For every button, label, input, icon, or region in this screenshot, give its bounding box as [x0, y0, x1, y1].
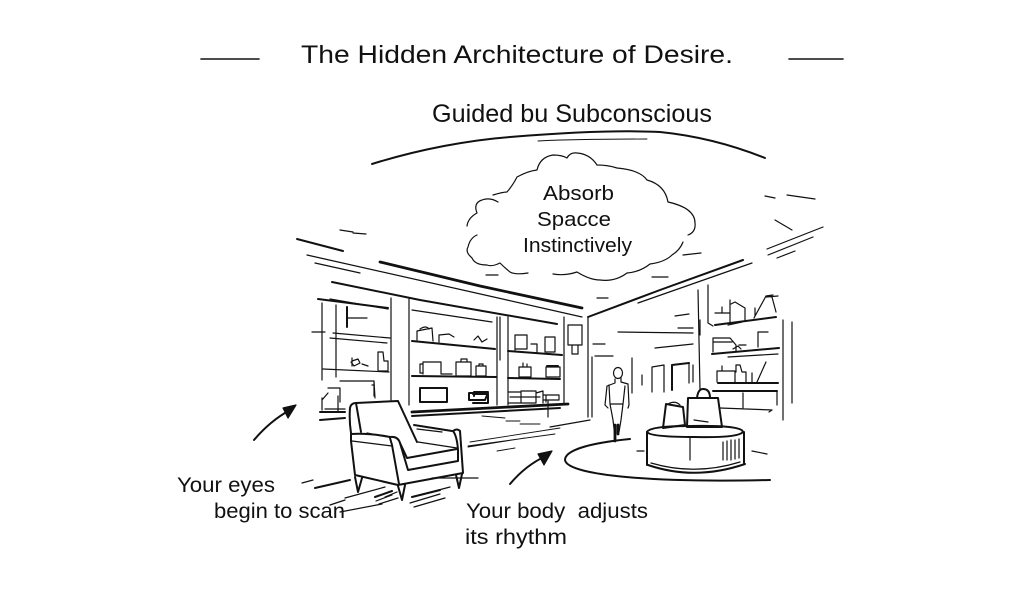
cloud text: Instinctively [523, 235, 632, 257]
walking figure [605, 368, 629, 441]
rug [565, 439, 770, 481]
cloud text: Absorb [543, 183, 614, 205]
arrow: your body [510, 451, 552, 484]
display table [637, 426, 767, 473]
ceiling arch [372, 131, 765, 164]
caption: your body adjusts its rhythm [465, 500, 648, 549]
ceiling and left wall lines [297, 195, 823, 324]
caption: your eyes begin to scan [177, 474, 345, 523]
heading: guided by subconscious: Guided bu Subconscious [432, 100, 712, 128]
arrow: your eyes [254, 405, 296, 440]
right wall panel: column [568, 325, 582, 354]
back wall lines and doors [548, 314, 693, 427]
thought cloud [467, 153, 695, 280]
cloud text: Spacce [537, 209, 611, 231]
caption: your body adjusts its rhythm: Your body adjusts [466, 500, 648, 523]
caption: your body adjusts its rhythm: its rhythm [465, 526, 567, 549]
caption: your eyes begin to scan: begin to scan [214, 500, 345, 523]
right shelving with bags [698, 285, 792, 420]
caption: your eyes begin to scan: Your eyes [177, 474, 275, 497]
armchair [302, 401, 560, 512]
left shelving [312, 298, 588, 420]
shelf products [320, 327, 560, 420]
title: The Hidden Architecture of Desire. [301, 41, 733, 69]
cloud text [523, 183, 632, 257]
shopping bags on table [663, 389, 722, 428]
